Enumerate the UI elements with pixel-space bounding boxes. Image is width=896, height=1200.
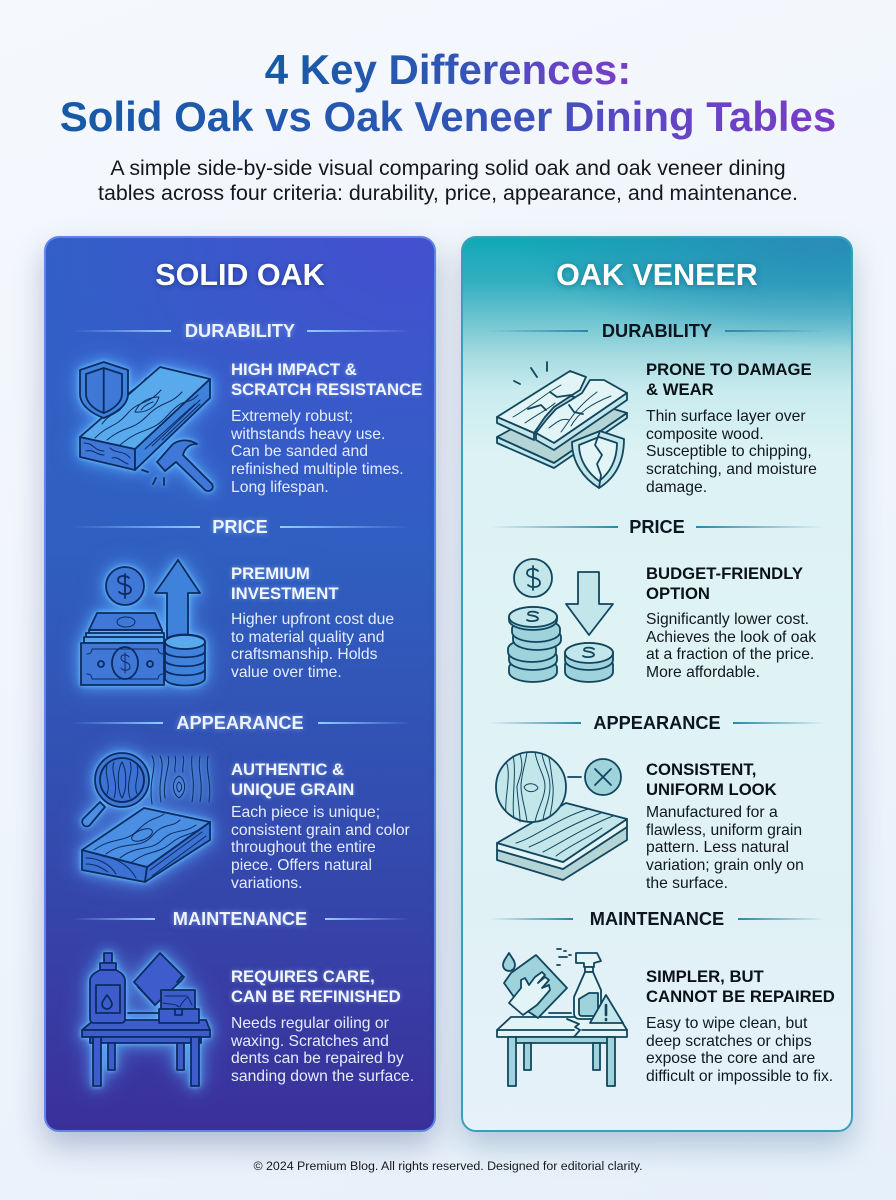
card text: maintenance: deep scratches or chips <box>646 1033 812 1050</box>
card heading: durability <box>646 360 812 398</box>
section label: durability: DURABILITY <box>185 321 295 341</box>
card text: durability: Can be sanded and <box>231 443 368 460</box>
card heading: price: OPTION <box>646 584 710 602</box>
panel heading: oak veneer: OAK VENEER <box>556 258 758 292</box>
card heading: price: BUDGET-FRIENDLY <box>646 564 803 583</box>
card text: maintenance: Needs regular oiling or <box>231 1015 389 1032</box>
section label: maintenance: MAINTENANCE <box>173 909 307 929</box>
card text: durability: damage. <box>646 479 707 496</box>
card text: durability: composite wood. <box>646 426 764 443</box>
card text: appearance: flawless, uniform grain <box>646 822 802 839</box>
subtitle: A simple side-by-side visual comparing solid oak and oak veneer dining <box>110 156 786 180</box>
title <box>60 46 836 140</box>
panel: solid oak <box>44 236 436 1132</box>
card text: price: to material quality and <box>231 629 384 646</box>
panel heading: solid oak: SOLID OAK <box>155 258 325 292</box>
card text: maintenance <box>231 1015 414 1085</box>
card text: price: Achieves the look of oak <box>646 629 816 646</box>
footer: © 2024 Premium Blog. All rights reserved. Designed for editorial clarity. <box>253 1159 643 1173</box>
section label: durability: DURABILITY <box>602 321 712 341</box>
section label: maintenance: MAINTENANCE <box>590 909 724 929</box>
card heading: durability: HIGH IMPACT & <box>231 360 357 379</box>
card text: durability: withstands heavy use. <box>231 426 385 443</box>
card text: durability: Susceptible to chipping, <box>646 443 812 460</box>
card heading: appearance: UNIFORM LOOK <box>646 780 777 798</box>
card text: appearance: variation; grain only on <box>646 857 804 874</box>
card heading: maintenance: CAN BE REFINISHED <box>231 986 401 1006</box>
icon: cracked veneer layers and broken shield <box>496 361 628 489</box>
card text: durability: Extremely robust; <box>231 408 353 425</box>
icon: oil bottle, cloth and kit on table <box>70 942 222 1097</box>
section label: appearance: APPEARANCE <box>593 713 721 733</box>
card text: durability: Long lifespan. <box>231 479 329 496</box>
card heading: maintenance: SIMPLER, BUT <box>646 967 764 986</box>
card heading: durability: & WEAR <box>646 380 714 398</box>
card text: price: Significantly lower cost. <box>646 611 809 628</box>
card text: maintenance: sanding down the surface. <box>231 1068 414 1085</box>
panel: oak veneer <box>461 236 853 1132</box>
icon: magnified uniform veneer block <box>495 751 628 881</box>
card text: appearance: Each piece is unique; <box>231 804 380 821</box>
card text: appearance: Manufactured for a <box>646 804 778 821</box>
icon: magnifier over wood grain <box>69 741 222 894</box>
card heading: appearance: AUTHENTIC & <box>231 760 344 779</box>
icon: cleaning a cracked table <box>496 948 628 1087</box>
card text: price: More affordable. <box>646 664 760 681</box>
icon: money and rising arrow <box>68 554 218 698</box>
card heading: durability <box>230 360 422 398</box>
card text: maintenance: expose the core and are <box>646 1050 815 1067</box>
card heading: appearance <box>230 760 356 800</box>
card text: durability <box>231 408 404 496</box>
card heading: price <box>230 564 339 602</box>
card text: durability: scratching, and moisture <box>646 461 817 478</box>
card heading: price: INVESTMENT <box>231 584 339 602</box>
card text: durability <box>646 408 817 496</box>
card text: appearance: variations. <box>231 875 302 892</box>
card heading: durability: PRONE TO DAMAGE <box>646 360 812 379</box>
card text: maintenance: difficult or impossible to fix. <box>646 1068 833 1085</box>
card heading: maintenance <box>230 967 402 1006</box>
card text: maintenance <box>646 1015 833 1085</box>
card text: price <box>646 611 816 681</box>
card heading: maintenance <box>646 967 835 1006</box>
card text: maintenance: dents can be repaired by <box>231 1050 404 1067</box>
card text: price: craftsmanship. Holds <box>231 646 377 663</box>
card text: price <box>231 611 394 681</box>
card heading: appearance: UNIQUE GRAIN <box>231 780 354 798</box>
card text: appearance: pattern. Less natural <box>646 839 789 856</box>
card heading: price <box>646 564 803 602</box>
card heading: appearance <box>646 760 777 798</box>
card text: price: value over time. <box>231 664 342 681</box>
subtitle <box>98 156 798 205</box>
card text: price: at a fraction of the price. <box>646 646 814 663</box>
card text: price: Higher upfront cost due <box>231 611 394 628</box>
section label: price: PRICE <box>212 517 268 537</box>
card text: appearance: throughout the entire <box>231 839 376 856</box>
card text: appearance: the surface. <box>646 875 728 892</box>
card heading: price: PREMIUM <box>231 564 310 583</box>
title: Solid Oak vs Oak Veneer Dining Tables <box>60 93 836 140</box>
icon: oak plank with shield and hammer <box>68 352 222 500</box>
card heading: appearance: CONSISTENT, <box>646 760 756 779</box>
icon: coins and falling arrow <box>507 558 614 683</box>
card text: appearance: piece. Offers natural <box>231 857 372 874</box>
card text: durability: refinished multiple times. <box>231 461 404 478</box>
card heading: durability: SCRATCH RESISTANCE <box>231 380 422 398</box>
card heading: maintenance: CANNOT BE REPAIRED <box>646 986 835 1006</box>
subtitle: tables across four criteria: durability, price, appearance, and maintenance. <box>98 181 798 205</box>
section label: appearance: APPEARANCE <box>176 713 304 733</box>
card text: appearance: consistent grain and color <box>231 822 410 839</box>
card text: appearance <box>646 804 804 892</box>
card text: appearance <box>231 804 410 892</box>
title: 4 Key Differences: <box>265 46 631 93</box>
section label: price: PRICE <box>629 517 685 537</box>
card text: maintenance: Easy to wipe clean, but <box>646 1015 807 1032</box>
card heading: maintenance: REQUIRES CARE, <box>231 967 375 986</box>
card text: maintenance: waxing. Scratches and <box>231 1033 389 1050</box>
card text: durability: Thin surface layer over <box>646 408 806 425</box>
